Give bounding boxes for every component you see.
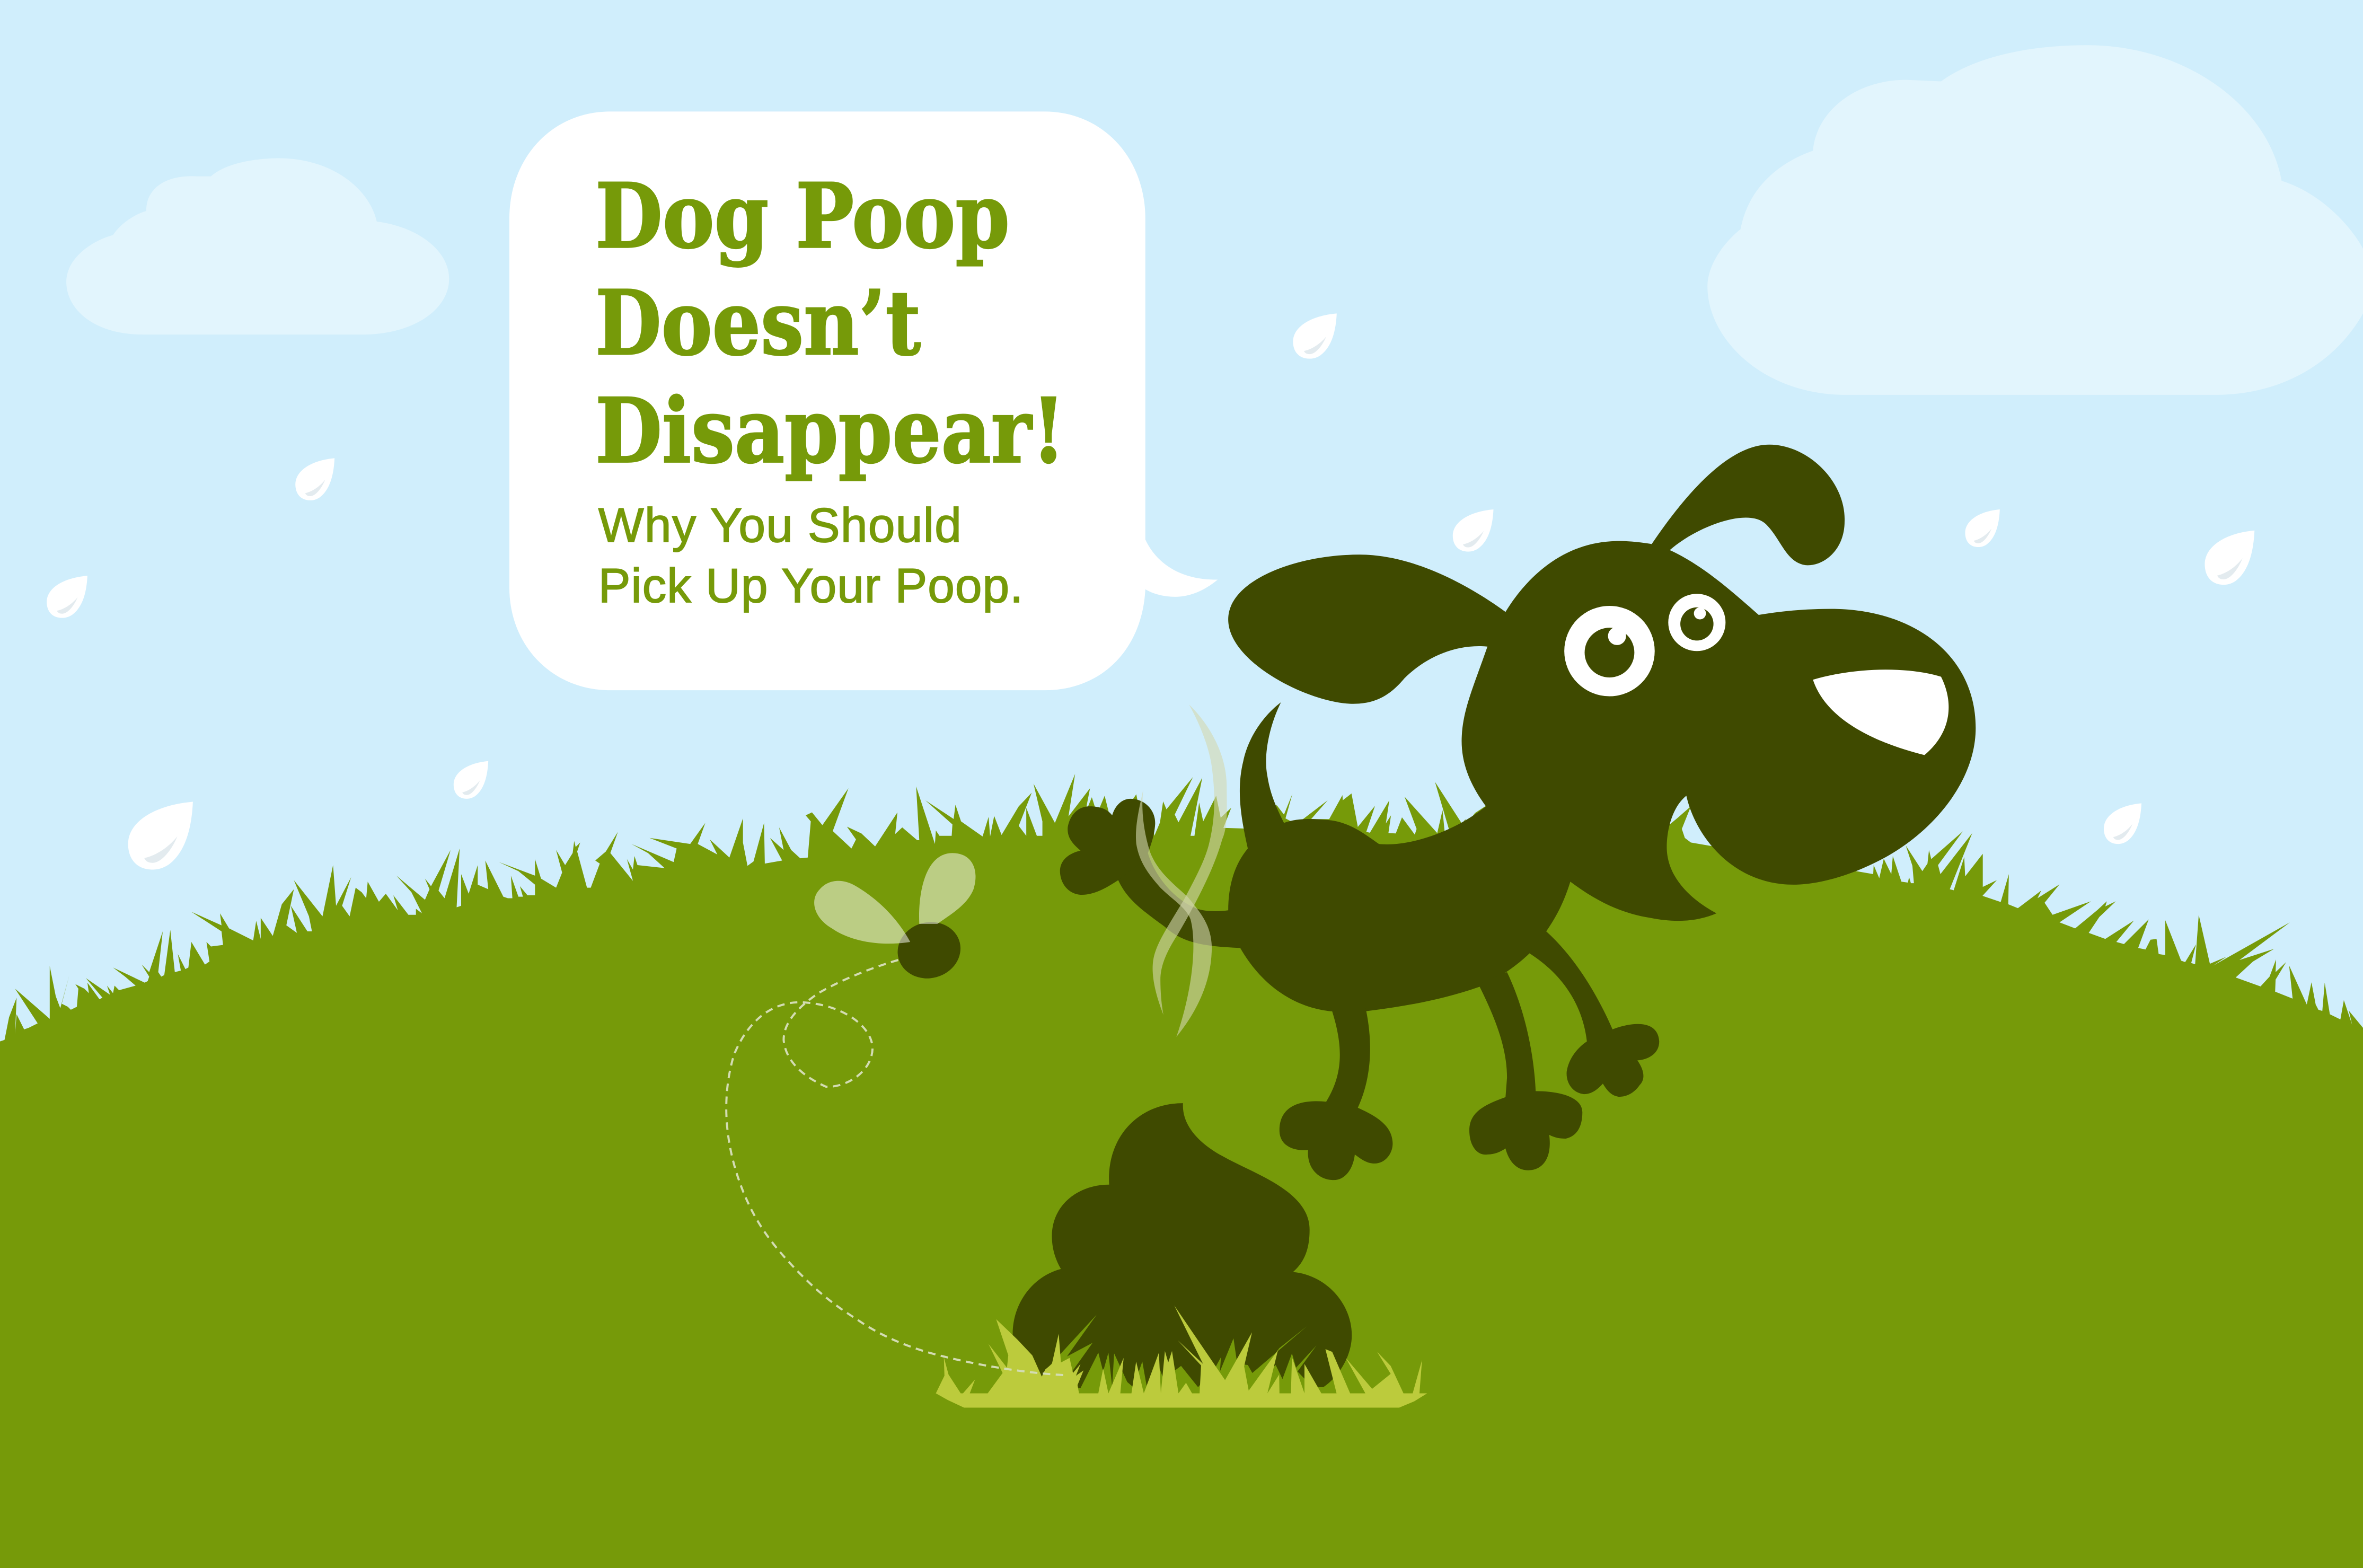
cloud: right xyxy=(1707,45,2363,395)
poop xyxy=(1013,1103,1352,1388)
dog large eye xyxy=(1564,606,1655,697)
subtitle: Why You Should xyxy=(598,499,962,552)
dog nose xyxy=(1813,670,1948,755)
dog body, head and ears xyxy=(1118,445,1976,1011)
title xyxy=(595,163,1065,483)
subtitle xyxy=(598,499,1023,613)
raised leg xyxy=(1528,931,1659,1097)
back leg xyxy=(1280,1007,1392,1180)
green hill with grass edge xyxy=(0,774,2363,1568)
cloud: left xyxy=(66,158,449,334)
title: Doesn’t xyxy=(595,270,921,375)
fly flight path xyxy=(726,960,1064,1375)
dog xyxy=(1060,445,1976,1180)
title: Dog Poop xyxy=(595,163,1010,268)
front leg xyxy=(1469,972,1582,1170)
tail tip paw xyxy=(1060,799,1155,895)
grass tuft: light blades xyxy=(936,1306,1427,1407)
subtitle: Pick Up Your Poop. xyxy=(598,559,1023,613)
raindrops xyxy=(47,313,2254,869)
speech bubble xyxy=(509,111,1218,690)
smell wisps xyxy=(1136,704,1227,1037)
title: Disappear! xyxy=(595,378,1065,483)
fly wings xyxy=(814,853,975,944)
grass tuft: dark blades xyxy=(1044,1315,1326,1393)
dog small eye xyxy=(1668,594,1725,651)
fly body xyxy=(891,915,967,985)
fly xyxy=(814,853,975,985)
